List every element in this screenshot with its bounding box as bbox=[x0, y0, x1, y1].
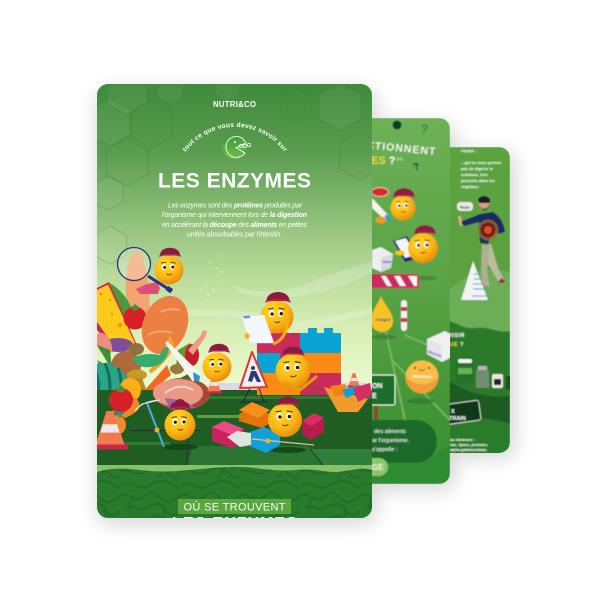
baguette bbox=[126, 251, 150, 322]
illustration: ham and lower food bbox=[106, 378, 210, 435]
mushroom bbox=[127, 370, 150, 400]
illustration: glucose cube right bbox=[427, 331, 454, 362]
illustration: road barrier bbox=[372, 273, 420, 289]
soft card shadows bbox=[97, 90, 515, 524]
section heading accent: QUE ? bbox=[445, 342, 464, 348]
icon: supplement bottles bbox=[456, 358, 512, 390]
chicken leg bbox=[188, 330, 207, 355]
intro text: présente dans les bbox=[461, 178, 496, 183]
ground strip bbox=[215, 383, 372, 391]
leek leaves bbox=[97, 345, 112, 378]
illustration: lego wall bbox=[257, 328, 341, 395]
road lines bbox=[379, 300, 450, 420]
cucumber bbox=[132, 347, 169, 367]
illustration: glucose cube left bbox=[372, 247, 393, 272]
punch hole bbox=[393, 121, 401, 129]
potato bbox=[111, 351, 141, 381]
section heading: CHOISIR bbox=[439, 333, 465, 339]
intro paragraph: unités absorbables par l'intestin. bbox=[187, 232, 282, 238]
character: wheelbarrow worker bbox=[276, 347, 372, 412]
watermelon bbox=[76, 363, 130, 417]
curved subtitle bbox=[183, 127, 287, 156]
panel: middle card, how enzymes work bbox=[372, 118, 450, 484]
icon: green question mark: ? bbox=[420, 121, 430, 137]
light clouds bbox=[188, 262, 372, 330]
illustration: minerals ball bbox=[406, 360, 438, 404]
intro paragraph: Les enzymes sont des protéines produites par bbox=[168, 202, 303, 210]
illustration: road work sign bbox=[240, 352, 267, 402]
intro text: cellulose, très bbox=[461, 172, 488, 177]
intro paragraph bbox=[162, 202, 308, 238]
illustration: glucose cube left: Gluco bbox=[382, 260, 392, 264]
bottom ground bbox=[372, 445, 450, 484]
bottom text: ase, lipase, protéase, bbox=[450, 443, 488, 447]
dust specks bbox=[200, 256, 222, 300]
sky gradient bbox=[97, 84, 372, 394]
illustration: omega 6 drop: Oméga 6 bbox=[375, 318, 391, 322]
illustration: cone far right bbox=[347, 373, 361, 387]
hexagon background bbox=[97, 84, 372, 264]
section label: OÙ SE TROUVENT bbox=[184, 500, 286, 514]
orange squash bbox=[150, 340, 172, 372]
illustration: clipboard character bbox=[393, 225, 438, 280]
speech bubble bbox=[457, 202, 473, 211]
illustration: minerals ball: Minéraux bbox=[412, 374, 432, 379]
signpost: E bbox=[372, 393, 377, 400]
carrot bbox=[143, 365, 171, 393]
big bread bbox=[133, 289, 197, 361]
illustration: man with stomach ache bbox=[458, 196, 505, 286]
leaves bbox=[110, 283, 135, 320]
panel: front card, les enzymes: tout ce que vous devez savoir sur bbox=[182, 122, 287, 152]
illustration: cone far left bbox=[92, 411, 128, 449]
aubergine stick bbox=[148, 372, 200, 398]
ground bbox=[97, 390, 372, 480]
hill behind man bbox=[450, 270, 510, 332]
signpost: ON bbox=[372, 383, 382, 390]
section heading cut off: LES ENZYMES bbox=[172, 515, 297, 532]
bottom text: au minimum : bbox=[450, 438, 475, 442]
illustration: red meat bbox=[372, 188, 388, 196]
illustration: omega 6 drop bbox=[371, 296, 396, 340]
button: box bbox=[449, 399, 482, 426]
character: pickaxe worker bbox=[135, 400, 198, 450]
character: magnifier inspector bbox=[118, 248, 184, 294]
text bubble: des aliments bbox=[374, 429, 406, 435]
illustration: saw character bbox=[372, 188, 416, 224]
lego bricks foreground bbox=[212, 402, 324, 448]
bottom text: alpha-galactosidase. bbox=[450, 448, 487, 452]
title: LES ENZYMES bbox=[158, 170, 311, 192]
section heading accent: ES ? bbox=[371, 155, 395, 167]
ground lighter planes bbox=[187, 446, 328, 470]
intro paragraph: l'organisme qui interviennent lors de la digestion bbox=[162, 212, 307, 219]
button: box: X bbox=[451, 409, 455, 415]
illustration: food pile bbox=[76, 251, 207, 417]
icon: pacman enzyme bbox=[222, 135, 251, 159]
character: shovel worker bbox=[227, 397, 314, 453]
icon: dark question mark: ? bbox=[412, 161, 421, 174]
red pepper bbox=[185, 344, 199, 366]
section heading accent: (14) bbox=[395, 157, 403, 161]
cheese bbox=[97, 282, 137, 351]
ground highlight strip bbox=[97, 465, 372, 473]
answer pill bbox=[372, 457, 389, 477]
intro text: pas de digérer le bbox=[461, 166, 494, 171]
tomato bbox=[124, 304, 146, 330]
illustration: paper sheet bbox=[461, 261, 488, 300]
panel: front card, les enzymes bbox=[97, 84, 372, 518]
illustration: cone near sign bbox=[206, 376, 222, 394]
panel: back card, digestive discomfort bbox=[449, 147, 510, 453]
intro paragraph: en accélérant la découpe des aliments en petites bbox=[162, 222, 308, 229]
text bubble: ar l'organisme. bbox=[372, 438, 410, 444]
signpost bbox=[372, 374, 396, 421]
bottom panel bbox=[450, 321, 510, 398]
brand logo: NUTRI&CO bbox=[213, 100, 256, 109]
veggie greens bbox=[175, 343, 198, 375]
eggplant bbox=[103, 338, 133, 352]
character: saw worker bbox=[165, 341, 232, 382]
button: box: TRAIN bbox=[449, 416, 466, 422]
speech bubble: Nope bbox=[460, 204, 471, 210]
text bubble: s'appelle : bbox=[372, 447, 398, 453]
infographic stage bbox=[89, 82, 523, 532]
section heading: FONCTIONNENT bbox=[341, 137, 437, 158]
bottom wavy band bbox=[97, 467, 372, 518]
intro text: équipé... bbox=[461, 148, 477, 153]
illustration: striped pole bbox=[401, 300, 407, 331]
character: reading plan bbox=[242, 292, 294, 344]
text bubble bbox=[372, 420, 438, 464]
intro text: végétaux. bbox=[461, 184, 479, 189]
intro text: ...qui ne nous permet bbox=[461, 160, 502, 165]
illustration: glucose cube right: Glucose bbox=[427, 350, 442, 358]
answer pill: GE bbox=[372, 463, 384, 472]
